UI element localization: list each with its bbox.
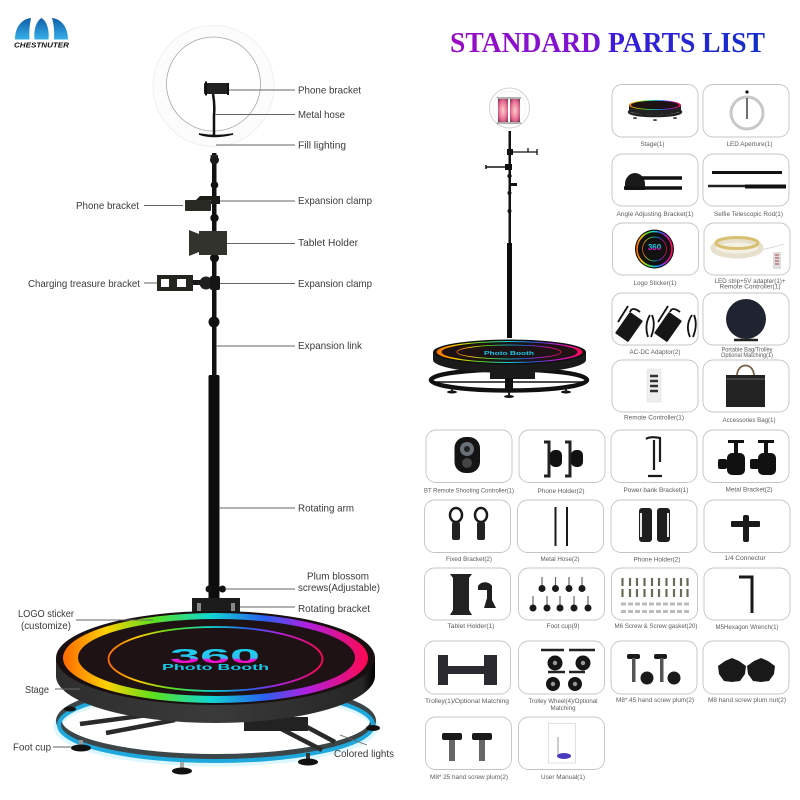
annotation labels: Rotating bracket [298,603,370,615]
part: Stage: Stage(1) [640,141,664,148]
annotation labels: Tablet Holder [298,237,358,249]
stage with rainbow ring and logo sticker: Photo Booth [162,662,269,672]
part: M8* 25 hand screw plum: M8* 25 hand screw plum(2) [430,774,508,781]
part: Trolley Wheel [518,641,604,712]
leader lines [53,90,367,747]
annotation labels: Rotating arm [298,502,354,514]
part: Portable bag / trolley [703,293,789,359]
part: Remote Controller: Remote Controller(1) [624,414,684,422]
part: M5 Hexagon Wrench [704,568,790,631]
part: Phone Holder [611,500,697,564]
title: STANDARD PARTS LIST [450,27,765,59]
part: M8 hand screw plum nut: M8 hand screw plum nut(2) [708,697,786,704]
logo: Chestnuter: CHESTNUTER [14,42,69,50]
annotation labels: Colored lights [334,748,394,760]
part: M6 Screw and gasket: M6 Screw & Screw gasket(20) [614,623,698,630]
part: Selfie Telescopic Rod: Selfie Telescopic Rod(1) [714,211,783,218]
base ring with colored lights [58,685,374,762]
annotation labels: LOGO sticker [18,608,74,620]
part: Portable bag / trolley: Optional Matching(1) [721,352,773,359]
part: M5 Hexagon Wrench: M5Hexagon Wrench(1) [716,624,778,631]
part: Metal Bracket: Metal Bracket(2) [726,487,772,494]
assembled booth illustration [430,88,588,398]
annotation labels: Expansion link [298,340,363,352]
part: Tablet Holder [424,568,510,630]
foot cups [64,706,380,774]
part: User Manual [518,717,604,781]
annotation labels: screws(Adjustable) [298,582,380,594]
part: Foot cup: Foot cup(9) [546,623,580,630]
ring fill light [153,26,274,146]
part: M8 hand screw plum nut [703,641,789,704]
part: Accessories Bag: Accessories Bag(1) [722,417,776,424]
annotation labels: Metal hose [298,109,345,121]
part: BT Remote Shooting Controller: BT Remote Shooting Controller(1) [424,488,514,494]
part: 1/4 Connector [704,500,790,562]
part: Phone Holder: Phone Holder(2) [634,557,680,564]
assembled booth illustration: Photo Booth [484,351,535,357]
part: Trolley Wheel: Trolley Wheel(4)/Optional [528,698,598,705]
part: M8*.45 hand screw plum: M8*.45 hand screw plum(2) [616,697,694,704]
part: Angle Adjusting Bracket: Angle Adjusting Bracket(1) [616,211,694,218]
metal hose [213,94,214,136]
part: User Manual: User Manual(1) [541,774,585,781]
annotation labels [13,84,394,760]
main product: 360 photo booth with annotations [13,26,394,774]
part: Metal Bracket [703,430,789,494]
part: LED Aperture [703,84,789,148]
part: AC-DC Adaptor [612,293,698,356]
stage with rainbow ring and logo sticker [56,611,375,723]
part: Trolley: Trolley(1)/Optional Matching [425,698,509,705]
part: Fixed Bracket [424,500,510,563]
part: 1/4 Connector: 1/4 Connector [724,555,766,562]
part: Trolley Wheel: Matching [550,705,576,712]
annotation labels: Phone bracket [298,84,361,96]
part: LED strip, adapter and remote: Remote Controller(1) [720,284,780,290]
part: Metal Hose: Metal Hose(2) [540,556,580,563]
annotation labels: Expansion clamp [298,195,372,207]
part: Logo Sticker [612,223,698,287]
part: Remote Controller [612,360,698,422]
phone bracket on ring [204,82,229,96]
annotation labels: Expansion clamp [298,278,372,290]
part: Foot cup [518,568,604,630]
part: Metal Hose [518,500,604,563]
charging treasure bracket [157,275,220,291]
part: Power bank Bracket: Power bank Bracket(1) [624,487,688,494]
part: AC-DC Adaptor: AC-DC Adaptor(2) [630,349,680,356]
parts list grid [424,84,790,781]
part: LED strip, adapter and remote [704,223,790,290]
annotation labels: Fill lighting [298,140,346,152]
tablet holder [189,230,227,256]
part: Selfie Telescopic Rod [703,154,789,218]
annotation labels: Stage [25,684,49,696]
part: Phone Holder: Phone Holder(2) [538,488,584,495]
part: BT Remote Shooting Controller [424,430,514,494]
part: Power bank Bracket [611,430,697,494]
rotating bracket and screws [192,586,240,614]
part: Angle Adjusting Bracket [612,154,698,218]
part: Portable bag / trolley: Portable Bag/Trolley [722,347,773,354]
part: Phone Holder [519,430,605,495]
annotation labels: Plum blossom [307,570,369,582]
annotation labels: (customize) [21,620,71,632]
part: Logo Sticker: Logo Sticker(1) [634,280,676,287]
part: Logo Sticker: 360 [648,243,662,252]
part: Trolley [424,641,510,705]
annotation labels: Charging treasure bracket [28,278,140,290]
telescopic pole [208,153,220,600]
part: LED Aperture: LED Aperture(1) [726,141,772,148]
annotation labels: Foot cup [13,742,51,754]
part: M8*.45 hand screw plum [611,641,697,704]
part: Fixed Bracket: Fixed Bracket(2) [446,556,492,563]
annotation labels: Phone bracket [76,200,139,212]
part: M6 Screw and gasket [612,568,698,630]
part: LED strip, adapter and remote: LED strip+5V adapter(1)+ [714,278,786,285]
part: Stage [612,84,698,148]
part: Accessories Bag [703,360,789,424]
part: Tablet Holder: Tablet Holder(1) [448,623,494,630]
part: M8* 25 hand screw plum [426,717,512,781]
logo: Chestnuter [14,18,69,50]
stage with rainbow ring and logo sticker: 360 [170,646,260,668]
phone bracket on clamp [185,196,220,211]
